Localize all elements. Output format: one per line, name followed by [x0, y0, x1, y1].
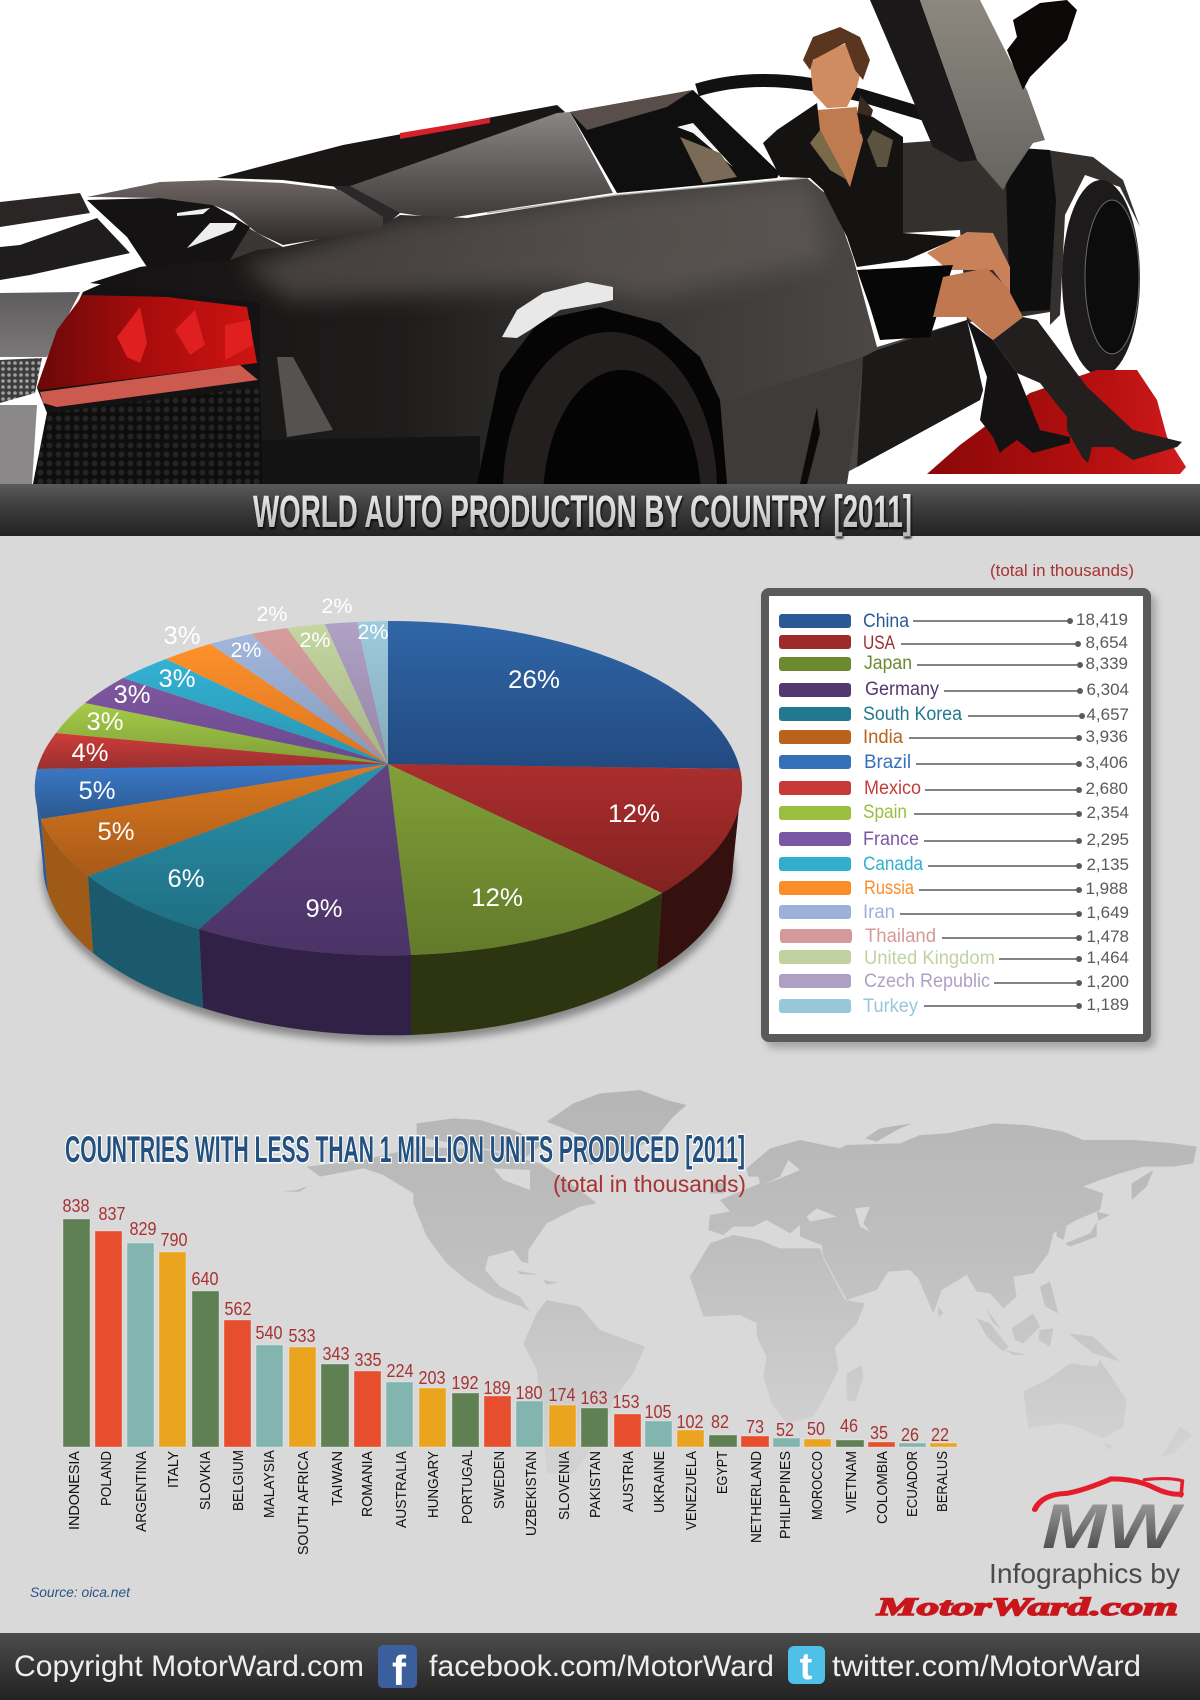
bar values: 192 — [452, 1373, 478, 1393]
pie percentage labels: 2% — [300, 629, 330, 652]
bar category labels: COLOMBIA — [875, 1451, 891, 1524]
legend row: Russia: Russia — [864, 878, 914, 899]
bar category labels: SLOVENIA — [557, 1451, 573, 1520]
pie percentage labels: 3% — [164, 622, 200, 650]
legend row: United Kingdom: 1,464 — [1086, 948, 1129, 967]
bar values: 153 — [612, 1392, 640, 1412]
pie chart: share of production — [35, 595, 742, 1042]
legend row: Czech Republic: 1,200 — [1086, 972, 1129, 991]
legend row: India: 3,936 — [1085, 727, 1128, 746]
bar category labels: AUSTRIA — [621, 1451, 637, 1512]
legend row: Spain: 2,354 — [1086, 803, 1129, 822]
bar values: 46 — [840, 1416, 858, 1436]
bar category labels: VIETNAM — [844, 1451, 860, 1513]
legend row: Spain — [779, 802, 1129, 823]
bar category labels: SWEDEN — [492, 1451, 508, 1509]
bar category labels: HUNGARY — [426, 1451, 442, 1518]
bar category labels: AUSTRALIA — [394, 1451, 410, 1528]
bar category labels — [67, 1450, 951, 1555]
pie percentage labels: 12% — [471, 884, 523, 912]
legend row: United Kingdom: United Kingdom — [864, 948, 995, 969]
legend row: Mexico: 2,680 — [1085, 779, 1128, 798]
pie percentage labels — [72, 595, 660, 923]
bar category labels: UZBEKISTAN — [524, 1451, 540, 1536]
legend row: United Kingdom — [779, 948, 1129, 969]
bar values: 22 — [931, 1425, 949, 1445]
bar values: 50 — [807, 1419, 825, 1439]
legend row: Czech Republic: Czech Republic — [864, 971, 990, 992]
bar values: 335 — [354, 1350, 382, 1370]
legend row: Czech Republic — [779, 971, 1129, 992]
legend row: South Korea — [779, 704, 1129, 725]
legend row: Spain: Spain — [863, 802, 907, 823]
bar values: 224 — [386, 1361, 414, 1381]
bar values: 102 — [676, 1412, 704, 1432]
legend row: Mexico — [779, 778, 1128, 799]
legend row: India — [779, 727, 1128, 748]
legend row: France — [779, 829, 1129, 850]
icon: twitter: t — [800, 1646, 813, 1688]
world map background — [283, 1090, 1197, 1473]
logo: MotorWard — [875, 1479, 1185, 1621]
legend row: Iran — [779, 902, 1129, 923]
bar values: 52 — [776, 1420, 794, 1440]
legend row: Germany — [779, 679, 1129, 700]
bar values: 562 — [224, 1299, 252, 1319]
pie percentage labels: 12% — [608, 800, 660, 828]
bar category labels: ARGENTINA — [134, 1451, 150, 1532]
legend row: Turkey: Turkey — [863, 996, 918, 1017]
bar values: 343 — [322, 1344, 350, 1364]
legend row: China: 18,419 — [1076, 610, 1128, 629]
legend row: Germany: Germany — [865, 679, 939, 700]
bar category labels: MOROCCO — [810, 1451, 826, 1520]
bar category labels: ROMANIA — [360, 1451, 376, 1517]
bar category labels: NETHERLAND — [749, 1451, 765, 1543]
legend row: USA: 8,654 — [1085, 633, 1128, 652]
legend row: France: France — [863, 829, 919, 850]
bar category labels: SOUTH AFRICA — [296, 1451, 312, 1555]
bar values: 163 — [580, 1388, 608, 1408]
bar category labels: PAKISTAN — [588, 1451, 604, 1518]
logo letters MW: MW — [1042, 1492, 1185, 1562]
icon: twitter — [788, 1646, 825, 1688]
legend row: Canada: 2,135 — [1086, 855, 1129, 874]
hero photo: car and woman — [0, 0, 1200, 484]
pie slices — [35, 621, 742, 955]
legend row: Turkey — [779, 995, 1129, 1017]
icon: facebook — [378, 1645, 417, 1694]
legend row: Brazil: 3,406 — [1085, 753, 1128, 772]
bar values: 180 — [516, 1383, 542, 1403]
logo tagline: Infographics by — [989, 1558, 1180, 1589]
pie percentage labels: 5% — [78, 777, 116, 805]
legend row: France: 2,295 — [1086, 830, 1129, 849]
bar category labels: ECUADOR — [905, 1451, 921, 1517]
bar values: 189 — [484, 1378, 510, 1398]
footer bar — [0, 1633, 1200, 1700]
bar values: 73 — [746, 1417, 764, 1437]
pie percentage labels: 5% — [98, 818, 134, 846]
bar values: 533 — [288, 1326, 316, 1346]
pie percentage labels: 9% — [306, 895, 342, 923]
legend row: Canada: Canada — [863, 854, 923, 875]
bar values: 203 — [418, 1368, 446, 1388]
panel: legend — [765, 592, 1156, 1048]
legend row: Thailand: Thailand — [865, 926, 936, 947]
legend row: Turkey: 1,189 — [1086, 995, 1129, 1014]
pie percentage labels: 26% — [508, 666, 560, 694]
bar values: 540 — [256, 1323, 282, 1343]
bar category labels: TAIWAN — [330, 1451, 346, 1506]
legend row: Thailand: 1,478 — [1086, 927, 1129, 946]
pie percentage labels: 2% — [230, 639, 262, 662]
legend row: South Korea: 4,657 — [1086, 705, 1129, 724]
legend row: Japan — [779, 653, 1128, 674]
legend row: Canada — [779, 854, 1129, 875]
bar values: 790 — [160, 1230, 188, 1250]
icon: red car swoosh — [1035, 1479, 1182, 1509]
bar values: 829 — [130, 1219, 156, 1239]
logo wordmark: MotorWard.com — [875, 1594, 1178, 1621]
pie percentage labels: 4% — [72, 739, 108, 767]
pie percentage labels: 2% — [358, 621, 388, 644]
pie percentage labels: 2% — [322, 595, 352, 618]
legend row: Germany: 6,304 — [1086, 680, 1129, 699]
source note: Source: oica.net — [30, 1585, 131, 1600]
legend row: Brazil: Brazil — [864, 752, 911, 773]
legend row: South Korea: South Korea — [863, 704, 962, 725]
bar chart: under 1 million units — [62, 1196, 957, 1555]
bar category labels: ITALY — [166, 1451, 182, 1488]
bar category labels: PHILIPPINES — [778, 1451, 794, 1539]
icon: facebook: f — [392, 1647, 407, 1694]
bar category labels: EGYPT — [715, 1451, 731, 1494]
legend row: Japan: Japan — [864, 653, 912, 674]
bar values: 82 — [711, 1412, 729, 1432]
legend row: Iran: 1,649 — [1086, 903, 1129, 922]
footer facebook link: facebook.com/MotorWard — [429, 1650, 774, 1683]
pie percentage labels: 3% — [158, 665, 196, 693]
bar category labels: BELGIUM — [231, 1450, 247, 1511]
legend row: China: China — [863, 611, 909, 632]
legend row: Russia — [779, 878, 1128, 899]
pie side walls — [35, 788, 741, 1035]
bar category labels: UKRAINE — [652, 1451, 668, 1513]
bar values: 174 — [548, 1385, 576, 1405]
bar values: 838 — [62, 1196, 90, 1216]
legend row: India: India — [863, 727, 903, 748]
legend note: total in thousands: (total in thousands) — [990, 561, 1134, 580]
footer twitter link: twitter.com/MotorWard — [832, 1650, 1141, 1683]
pie shadow — [42, 700, 734, 1042]
bar values: 105 — [644, 1402, 672, 1422]
legend row: USA: USA — [863, 633, 895, 654]
bar category labels: MALAYSIA — [262, 1450, 278, 1518]
bar category labels: VENEZUELA — [684, 1451, 700, 1530]
bar category labels: SLOVKIA — [198, 1451, 214, 1510]
footer copyright: Copyright MotorWard.com — [14, 1650, 364, 1683]
legend row: Russia: 1,988 — [1085, 879, 1128, 898]
pie percentage labels: 6% — [168, 865, 204, 893]
pie percentage labels: 2% — [256, 603, 288, 626]
legend row: Brazil — [779, 752, 1128, 773]
legend row: Mexico: Mexico — [864, 778, 921, 799]
title band — [0, 484, 1200, 537]
bar values: 26 — [901, 1425, 919, 1445]
bar category labels: POLAND — [99, 1451, 115, 1506]
bar category labels: PORTUGAL — [460, 1450, 476, 1524]
bar values: 837 — [98, 1204, 126, 1224]
legend row: Thailand — [780, 926, 1129, 947]
pie percentage labels: 3% — [114, 681, 150, 709]
bar values: 35 — [870, 1423, 888, 1443]
subheading: total in thousands: (total in thousands) — [553, 1171, 746, 1197]
legend row: China — [779, 610, 1128, 632]
bar values: 640 — [192, 1269, 218, 1289]
bar values — [62, 1196, 949, 1445]
bars — [63, 1219, 957, 1447]
legend row: Japan: 8,339 — [1085, 654, 1128, 673]
bar category labels: BERALUS — [935, 1451, 951, 1512]
bar category labels: INDONESIA — [67, 1451, 83, 1530]
pie percentage labels: 3% — [86, 708, 124, 736]
legend row: USA — [779, 633, 1128, 654]
legend row: Iran: Iran — [863, 902, 895, 923]
